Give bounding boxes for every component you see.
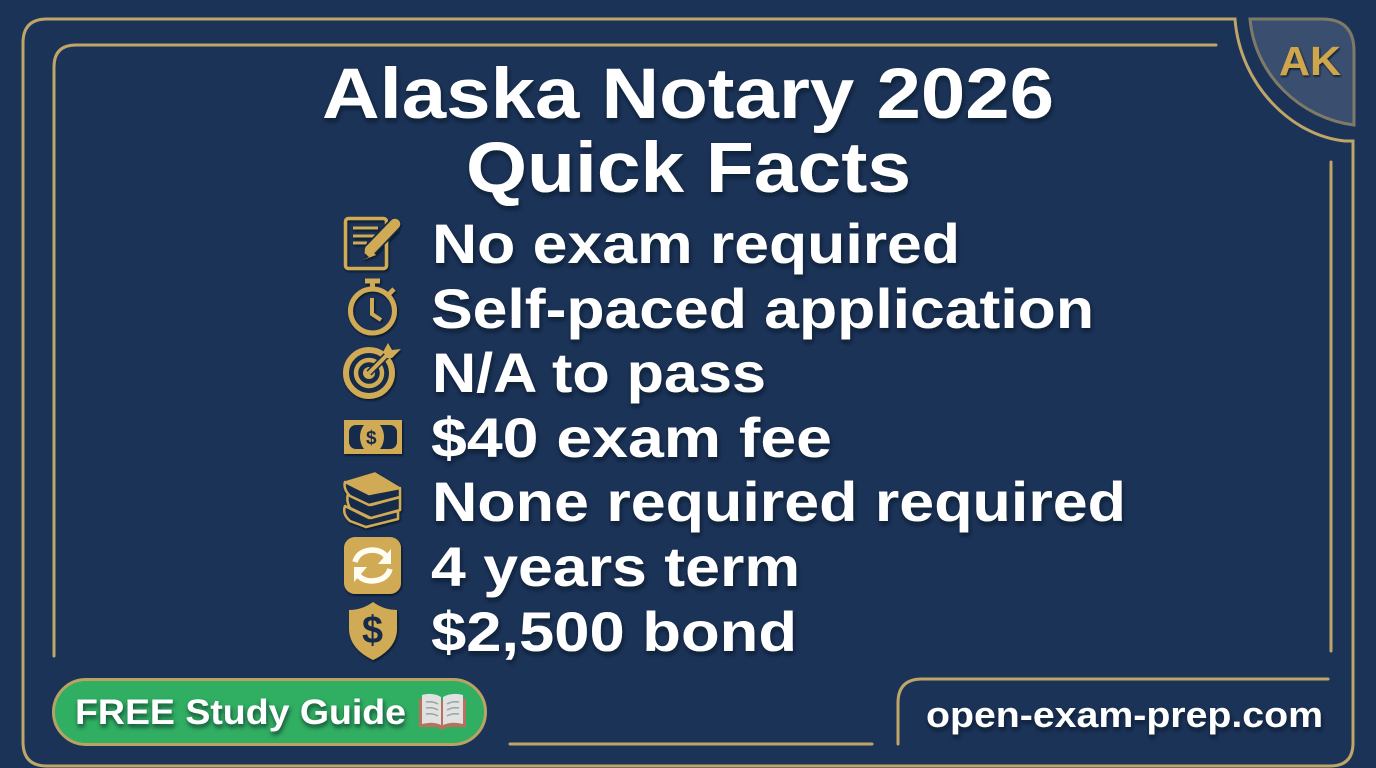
icon: renewal arrows bbox=[344, 537, 401, 594]
fact 6: term: 4 years term bbox=[431, 535, 800, 598]
icon: stacked books bbox=[344, 473, 400, 527]
icon: target with arrow bbox=[343, 343, 401, 399]
title bbox=[322, 55, 1054, 208]
icon: banknote bbox=[344, 420, 402, 454]
title: Quick Facts bbox=[466, 129, 911, 208]
title: Alaska Notary 2026 bbox=[322, 55, 1054, 134]
fact 5: education: None required required bbox=[432, 470, 1126, 533]
icon: banknote: $ bbox=[366, 428, 377, 449]
fact 4: exam fee: $40 exam fee bbox=[431, 406, 832, 469]
fact 2: self-paced: Self-paced application bbox=[431, 277, 1094, 340]
icon: shield with dollar bbox=[349, 602, 397, 660]
state badge: AK bbox=[1250, 19, 1354, 125]
button: free study guide: FREE Study Guide bbox=[75, 693, 406, 732]
website url: open-exam-prep.com bbox=[926, 694, 1323, 735]
icon: notepad and pencil bbox=[346, 218, 395, 268]
icon: open book bbox=[419, 694, 466, 730]
state badge: AK: AK bbox=[1279, 38, 1341, 84]
button: free study guide bbox=[54, 680, 486, 744]
fact 7: bond: $2,500 bond bbox=[431, 600, 797, 663]
icon: shield with dollar: $ bbox=[362, 609, 383, 652]
icon: stopwatch bbox=[350, 281, 394, 333]
fact 1: no exam: No exam required bbox=[432, 212, 960, 275]
fact 3: pass score: N/A to pass bbox=[432, 341, 766, 404]
fact list bbox=[343, 212, 1126, 663]
